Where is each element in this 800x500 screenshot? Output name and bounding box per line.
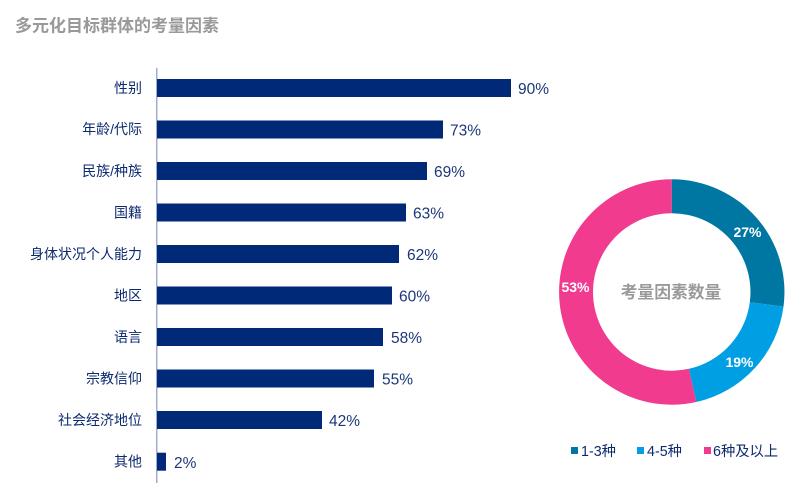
donut centre label: 考量因素数量 bbox=[621, 283, 722, 302]
bar row: 社会经济地位 42% bbox=[58, 411, 360, 430]
bar row: 语言 58%: 58% bbox=[391, 330, 422, 347]
bar row: 民族/种族 69%: 民族/种族 bbox=[82, 163, 142, 179]
bar row: 身体状况个人能力 62% bbox=[30, 245, 438, 264]
bar row: 身体状况个人能力 62%: 身体状况个人能力 bbox=[30, 246, 142, 262]
bar row: 身体状况个人能力 62%: 62% bbox=[407, 247, 438, 264]
bar row: 性别 90% bbox=[114, 79, 549, 98]
bar row: 社会经济地位 42%: 42% bbox=[329, 413, 360, 430]
bar row: 地区 60% bbox=[114, 286, 430, 306]
title: 多元化目标群体的考量因素 bbox=[15, 16, 219, 36]
bar row: 民族/种族 69%: 69% bbox=[434, 164, 465, 181]
bar row: 年龄/代际 73% bbox=[82, 120, 481, 140]
legend item: 1-3种: 1-3种 bbox=[581, 443, 616, 460]
bar row: 社会经济地位 42%: 社会经济地位 bbox=[58, 412, 142, 428]
bar row: 其他 2%: 2% bbox=[174, 455, 197, 472]
segment: 4-5种 19% bbox=[689, 302, 784, 402]
bar row: 地区 60%: 地区 bbox=[114, 288, 142, 304]
bar row: 年龄/代际 73%: 73% bbox=[450, 122, 481, 140]
legend item: 4-5种: 4-5种 bbox=[647, 443, 682, 460]
legend bbox=[571, 443, 778, 460]
bar row: 年龄/代际 73%: 年龄/代际 bbox=[82, 121, 142, 137]
bar row: 地区 60%: 60% bbox=[399, 288, 430, 306]
bar row: 语言 58% bbox=[114, 328, 422, 347]
donut value: 19%: 19% bbox=[725, 354, 754, 370]
bar row: 宗教信仰 55%: 55% bbox=[382, 372, 413, 388]
bar row: 宗教信仰 55%: 宗教信仰 bbox=[86, 370, 142, 386]
segment: 6种及以上 53% bbox=[559, 179, 696, 405]
bar row: 其他 2% bbox=[114, 453, 197, 472]
bar row: 国籍 63%: 63% bbox=[413, 206, 444, 222]
donut chart bbox=[559, 179, 784, 405]
bar row: 性别 90%: 90% bbox=[518, 81, 549, 98]
bar row: 国籍 63%: 国籍 bbox=[114, 204, 142, 220]
bar row: 宗教信仰 55% bbox=[86, 370, 413, 388]
bar row: 民族/种族 69% bbox=[82, 162, 465, 181]
bar chart bbox=[30, 68, 549, 483]
bar row: 性别 90%: 性别 bbox=[114, 80, 142, 96]
bar row: 其他 2%: 其他 bbox=[114, 454, 142, 470]
bar row: 语言 58%: 语言 bbox=[114, 329, 142, 345]
donut value: 53%: 53% bbox=[561, 279, 590, 295]
segment: 1-3种 27% bbox=[672, 179, 784, 307]
bar row: 国籍 63% bbox=[114, 204, 444, 222]
legend item: 6种及以上: 6种及以上 bbox=[713, 443, 778, 460]
donut value: 27%: 27% bbox=[733, 224, 762, 240]
